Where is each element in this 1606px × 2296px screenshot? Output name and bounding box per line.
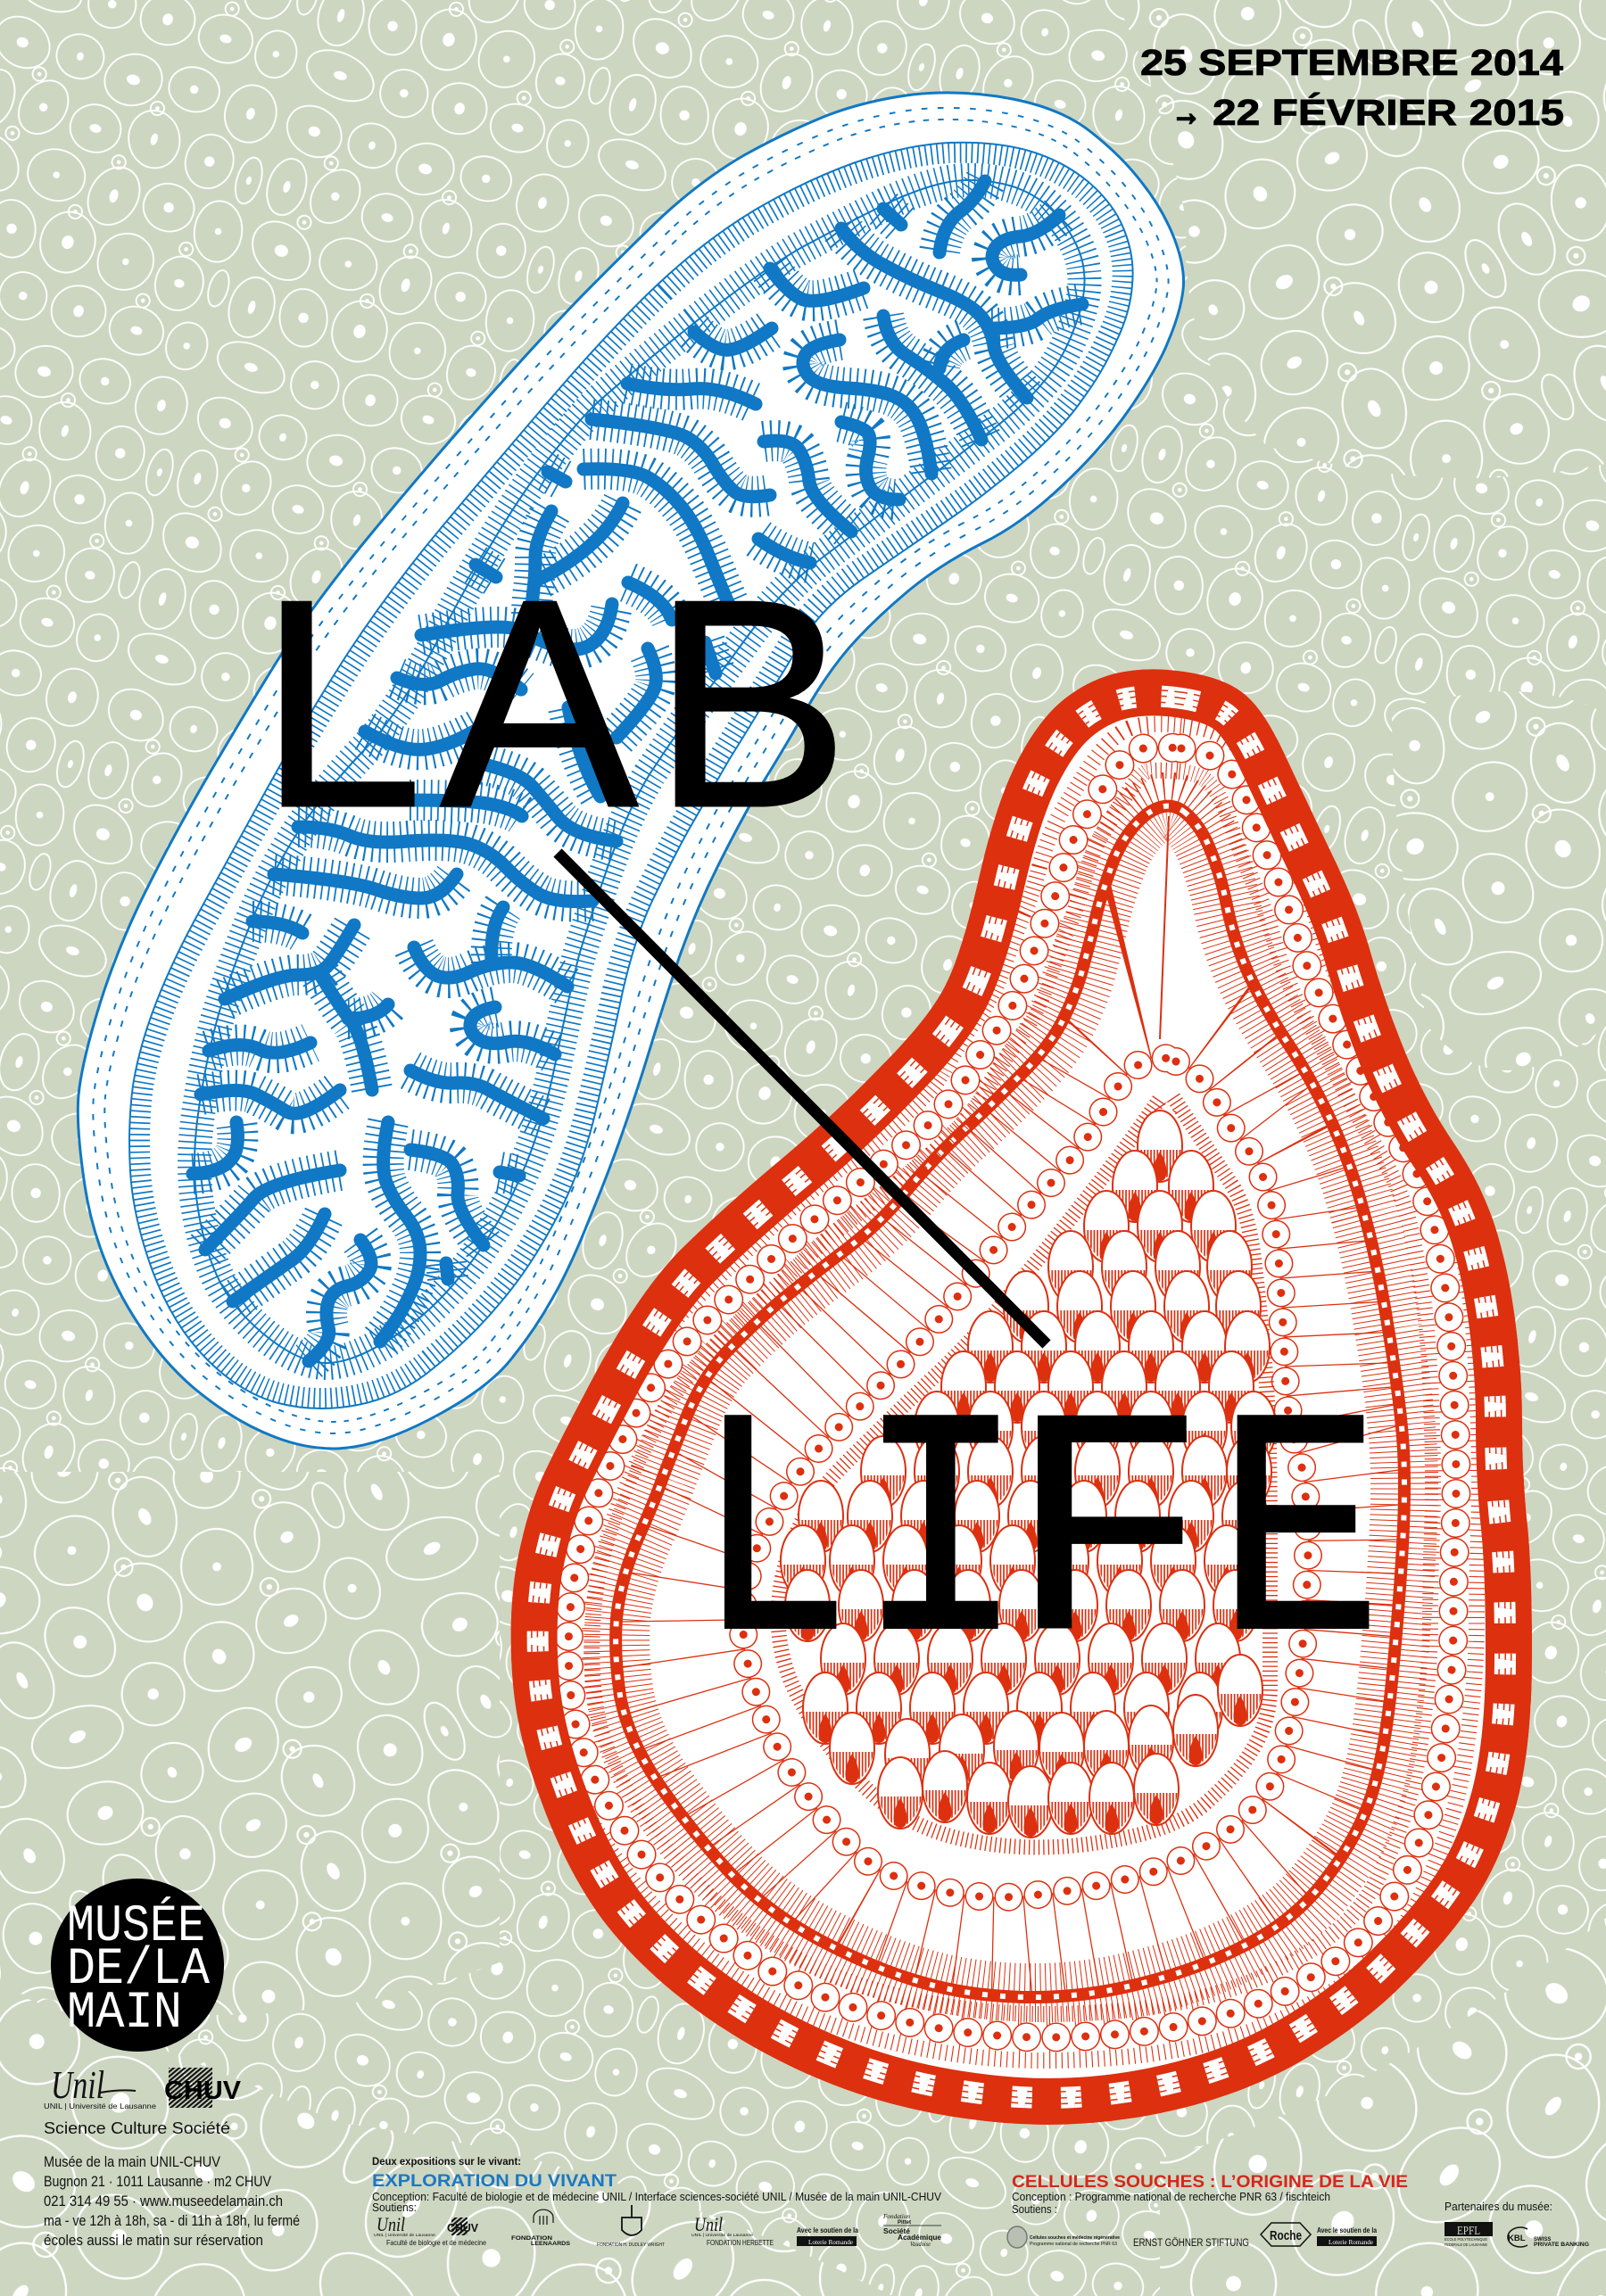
sponsor: Loterie Romande: Avec le soutien de la (1317, 2226, 1377, 2234)
exhibition dates: → (1171, 92, 1201, 133)
partner: EPFL: FEDERALE DE LAUSANNE (1445, 2242, 1487, 2247)
partner: KBL: PRIVATE BANKING (1534, 2242, 1589, 2248)
partner: EPFL: EPFL (1457, 2225, 1480, 2238)
red cell: striped thick membrane (511, 669, 1532, 2125)
sponsor: Fondation Herbette: UNIL | Université de Lausanne (691, 2233, 754, 2237)
exhibition dates: 22 FÉVRIER 2015 (1213, 92, 1564, 133)
red cell: chain band with fine hatch (616, 806, 1404, 1997)
exhibition block: Exploration du vivant: Conception: Faculté de biologie et de médecine UNIL / Interface sciences-société UNIL / Musée de la main UNIL-CHUV (372, 2191, 942, 2203)
UNIL logo (44, 2063, 157, 2110)
museum address: ma - ve 12h à 18h, sa - di 11h à 18h, lu fermé (44, 2213, 300, 2229)
title word: LIFE: L (696, 1361, 851, 1723)
museum address (44, 2154, 300, 2249)
exhibition dates (1140, 42, 1564, 133)
sponsor: Loterie Romande (797, 2226, 858, 2246)
sponsor: Loterie Romande (1317, 2226, 1377, 2246)
exhibition block: Exploration du vivant: Deux expositions sur le vivant: (372, 2155, 521, 2168)
sponsor: Société Académique Vaudoise: Fondation (882, 2213, 911, 2220)
sponsor: CHUV: CHUV (447, 2221, 478, 2234)
blue cell: inner hairy contour (195, 180, 1085, 1363)
exhibition block: Cellules souches: CELLULES SOUCHES : L’ORIGINE DE LA VIE (1012, 2172, 1408, 2192)
exhibition block: Exploration du vivant (372, 2155, 942, 2248)
blue cell: mitochondrion-like organism (78, 93, 1184, 1449)
sponsor: PNR 63: Cellules souches et médecine régénérative (1030, 2235, 1120, 2241)
sponsor: Fondation Herbette: Unil (694, 2213, 723, 2235)
museum logo (51, 1879, 224, 2052)
sponsor: Loterie Romande: Loterie Romande (808, 2239, 853, 2246)
red cell: central egg cluster (781, 1102, 1276, 1839)
sponsor: UNIL faculty: Unil (377, 2213, 405, 2235)
connecting diagonal line (558, 853, 1047, 1344)
sponsor: Loterie Romande: Loterie Romande (1329, 2239, 1373, 2246)
sponsor: Société Académique Vaudoise (882, 2213, 941, 2248)
partner: EPFL: ECOLE POLYTECHNIQUE (1445, 2237, 1487, 2242)
museum address: écoles aussi le matin sur réservation (44, 2233, 263, 2249)
sponsor: Fondation Dudley Wright (597, 2205, 665, 2248)
partner: EPFL (1445, 2222, 1493, 2247)
sponsor: Ernst Göhner Stiftung: ERNST GÖHNER STIFTUNG (1133, 2238, 1249, 2249)
red cell: long cell rounded tips (742, 1058, 1308, 1897)
sponsor: PNR 63 (1007, 2226, 1120, 2248)
exhibition dates: 25 SEPTEMBRE 2014 (1140, 42, 1563, 83)
museum logo: MAIN (67, 1985, 182, 2043)
museum partners (1445, 2201, 1589, 2248)
sponsor: PNR 63: Programme national de recherche PNR 63 (1030, 2242, 1117, 2247)
sponsor: Loterie Romande: Avec le soutien de la (797, 2226, 858, 2234)
exhibition block: Cellules souches (1007, 2172, 1408, 2249)
sponsor: Fondation Leenaards: LEENAARDS (531, 2241, 571, 2247)
title word: LAB: LAB (259, 539, 849, 869)
sponsor: Société Académique Vaudoise: Académique (898, 2233, 941, 2242)
title word: LIFE: E (1217, 1362, 1382, 1723)
sponsor: UNIL faculty: UNIL | Université de Lausanne (374, 2233, 436, 2237)
red cell: bubble cell row with nuclei (568, 747, 1456, 2037)
title word: LIFE (696, 1361, 1382, 1723)
red cell: stem cell organism (511, 669, 1532, 2125)
partner: KBL: SWISS (1534, 2237, 1551, 2242)
CHUV logo (164, 2068, 242, 2108)
exhibition block: Exploration du vivant: Soutiens: (372, 2201, 417, 2214)
partner: KBL: KBL (1508, 2234, 1526, 2243)
blue cell: hairy squiggles (193, 181, 1082, 1361)
museum address: 021 314 49 55 · www.museedelamain.ch (44, 2193, 283, 2209)
museum partners: Partenaires du musée: (1445, 2201, 1552, 2213)
blue cell: dashed outer membrane (78, 93, 1184, 1449)
sponsor: Fondation Leenaards: FONDATION (511, 2235, 552, 2242)
title word: LIFE: I (857, 1361, 1024, 1723)
sponsor: UNIL faculty (374, 2213, 486, 2247)
UNIL logo: UNIL | Université de Lausanne (44, 2102, 157, 2110)
red cell: radial long cells (742, 1058, 1308, 1897)
exhibition block: Cellules souches: Conception : Programme national de recherche PNR 63 / fischteich (1012, 2191, 1330, 2203)
tagline: Science Culture Société (44, 2118, 230, 2137)
sponsor: Fondation Dudley Wright: FONDATION H. DUDLEY WRIGHT (597, 2242, 665, 2248)
sponsor: Fondation Herbette: FONDATION HERBETTE (707, 2238, 774, 2247)
museum logo: DE/LA (67, 1941, 210, 1999)
UNIL logo: Unil (51, 2063, 104, 2107)
blue cell: outline (78, 93, 1184, 1449)
sponsor: Fondation Herbette (691, 2213, 774, 2247)
CHUV logo: CHUV (164, 2077, 242, 2105)
sponsor: Roche (1261, 2223, 1311, 2246)
museum logo: MUSÉE (67, 1897, 205, 1956)
exhibition block: Cellules souches: Soutiens : (1012, 2203, 1057, 2216)
blue cell: hatched ring (129, 143, 1133, 1408)
partner: KBL (1508, 2227, 1589, 2248)
sponsor: UNIL faculty: Faculté de biologie et de médecine (386, 2238, 486, 2247)
museum address: Bugnon 21 · 1011 Lausanne · m2 CHUV (44, 2174, 271, 2190)
sponsor: Société Académique Vaudoise: Société (883, 2226, 910, 2235)
sponsor: Société Académique Vaudoise: Pittet (898, 2220, 911, 2226)
sponsor: Société Académique Vaudoise: Vaudoise (910, 2241, 931, 2248)
museum address: Musée de la main UNIL-CHUV (44, 2154, 220, 2170)
sponsor: Fondation Leenaards (511, 2209, 571, 2247)
red cell: inner cavity (742, 1058, 1308, 1897)
title word: LIFE: F (1007, 1362, 1209, 1723)
exhibition block: Exploration du vivant: EXPLORATION DU VIVANT (372, 2171, 617, 2191)
red cell: spire line (1160, 816, 1169, 1039)
sponsor: Roche: Roche (1270, 2228, 1302, 2243)
